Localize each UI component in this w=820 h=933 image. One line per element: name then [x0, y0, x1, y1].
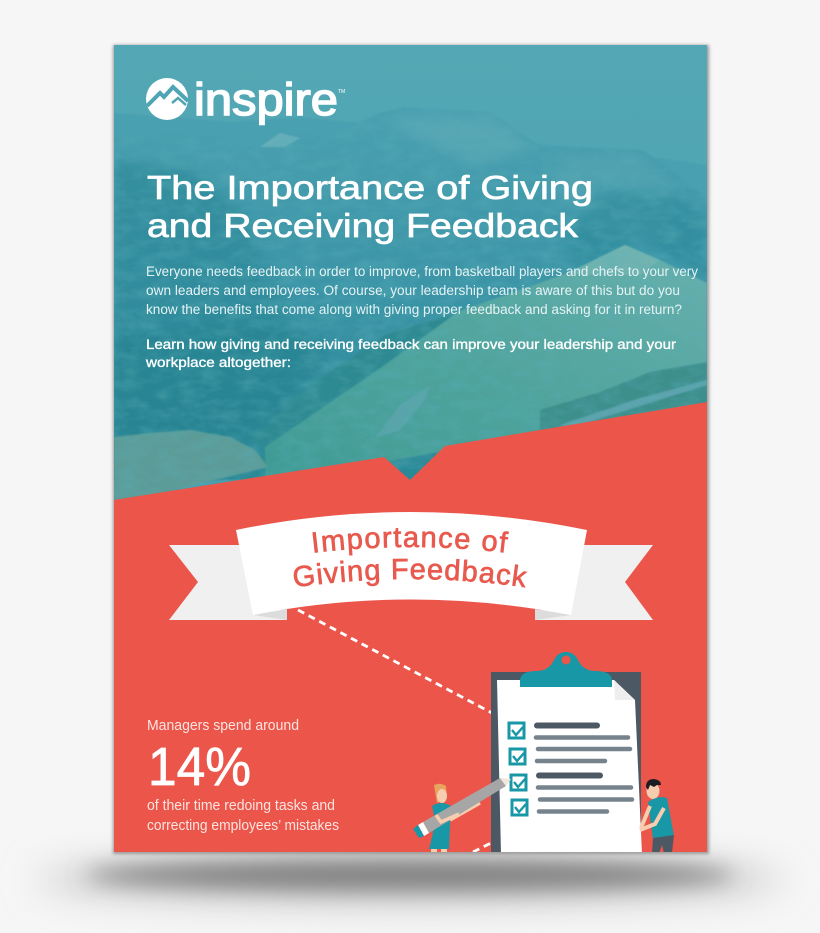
clipboard illustration — [413, 652, 674, 854]
intro paragraph: know the benefits that come along with giving proper feedback and asking for it in return? — [146, 302, 682, 317]
statistic text: correcting employees’ mistakes — [147, 818, 339, 834]
bold lead-in: Learn how giving and receiving feedback can improve your leadership and your — [146, 336, 676, 352]
list lines — [536, 726, 632, 812]
person left with pencil — [413, 778, 511, 852]
statistic text — [147, 718, 339, 834]
floor shadow — [35, 856, 785, 904]
ribbon title: Giving Feedback — [294, 558, 528, 588]
intro paragraph: own leaders and employees. Of course, your leadership team is aware of this but do you — [146, 283, 680, 298]
pencil — [423, 778, 506, 833]
ribbon left tail — [169, 545, 287, 620]
title: and Receiving Feedback — [147, 208, 578, 245]
ribbon front — [236, 512, 587, 615]
dashed connector lower — [473, 843, 491, 852]
dashed connector line — [298, 610, 492, 713]
statistic text: of their time redoing tasks and — [147, 798, 335, 814]
bold lead-in: workplace altogether: — [145, 354, 291, 370]
title — [147, 170, 593, 245]
title: The Importance of Giving — [147, 170, 593, 207]
intro paragraph — [146, 264, 698, 317]
logo mark — [146, 78, 188, 120]
poster page — [114, 45, 707, 852]
ribbon folds — [253, 609, 571, 620]
page shadow — [113, 45, 709, 854]
logo wordmark: inspire — [194, 74, 338, 125]
ribbon banner — [169, 512, 653, 620]
checkboxes — [509, 723, 527, 815]
ribbon right tail — [535, 545, 653, 620]
person right — [640, 779, 674, 853]
intro paragraph: Everyone needs feedback in order to improve, from basketball players and chefs to your very — [146, 264, 698, 279]
paper sheet — [497, 680, 642, 854]
clipboard board — [491, 672, 641, 854]
red lower section — [114, 402, 707, 852]
statistic text: Managers spend around — [147, 718, 299, 734]
clip — [520, 652, 612, 687]
logo — [146, 74, 345, 125]
header mountain photo — [114, 45, 707, 505]
ribbon title — [294, 528, 528, 588]
bold lead-in — [145, 336, 676, 370]
statistic text: 14% — [148, 737, 251, 797]
ribbon title: Importance of — [312, 528, 509, 556]
logo: TM — [338, 89, 345, 95]
